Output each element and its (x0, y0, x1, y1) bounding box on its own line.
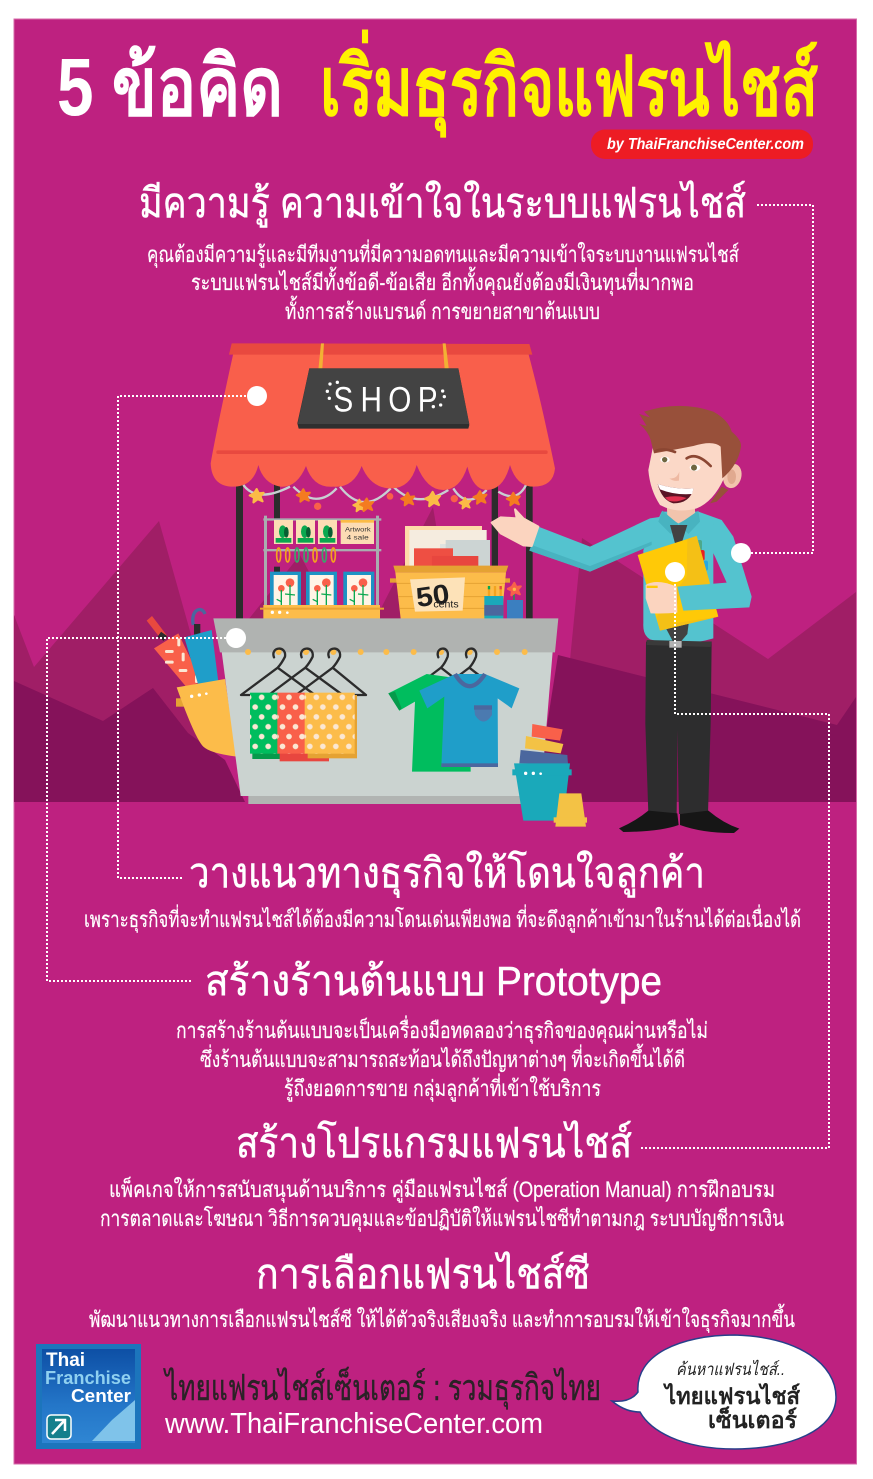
text block 4 (100, 1175, 784, 1232)
heading 1: มีความรู้ ความเข้าใจในระบบแฟรนไชส์ (139, 180, 746, 228)
art rack: Artwork (345, 526, 372, 533)
holding arm (677, 520, 752, 611)
text block 3: การสร้างร้านต้นแบบจะเป็นเครื่องมือทดลองว่าธุรกิจของคุณผ่านหรือไม่ (176, 1015, 708, 1044)
footer url: www.ThaiFranchiseCenter.com (164, 1408, 543, 1440)
marker: counter (226, 628, 246, 648)
text block 3 (176, 1015, 708, 1102)
speech bubble: ไทยแฟรนไชส์ (662, 1382, 801, 1409)
nose (669, 472, 679, 481)
umbrellas (147, 610, 218, 687)
stall posts (236, 483, 533, 620)
belt (647, 640, 712, 648)
shop sign: SHOP (333, 380, 438, 419)
mouth (658, 484, 694, 503)
connector: folder to heading 4 (640, 580, 829, 1148)
counter body (222, 652, 553, 796)
connector: counter to heading 3 (47, 638, 230, 981)
holding hand (646, 582, 677, 614)
pen jar and flower (484, 583, 523, 619)
basket with papers: 50 (414, 578, 451, 613)
byline pill (591, 130, 813, 159)
speech bubble: เซ็นเตอร์ (708, 1405, 798, 1433)
awning trim (216, 343, 548, 454)
eyes (660, 457, 700, 471)
awning (211, 353, 555, 490)
tabs (697, 540, 708, 571)
shoes (619, 811, 739, 833)
back hair (710, 487, 728, 503)
extended hand (492, 509, 538, 546)
speech bubble (612, 1335, 836, 1449)
art rack: 4 sale (347, 534, 369, 541)
text block 1 (147, 239, 739, 324)
heading 4: สร้างโปรแกรมแฟรนไชส์ (236, 1120, 632, 1166)
neck and collar (658, 497, 700, 534)
garland (243, 485, 526, 511)
counter base (248, 795, 527, 804)
basket with papers: cents (433, 599, 459, 610)
heading 3: สร้างร้านต้นแบบ Prototype (205, 958, 662, 1004)
t-shirts (388, 649, 519, 772)
title (57, 29, 818, 138)
sign straps (318, 343, 449, 373)
eyebrows (655, 449, 711, 466)
hangers and towels (241, 649, 366, 761)
stacked buckets (512, 724, 587, 827)
trousers (645, 642, 712, 814)
logo: Thai Franchise Center: Franchise (45, 1367, 131, 1388)
counter studs (245, 649, 528, 655)
heading 2: วางแนวทางธุรกิจให้โดนใจลูกค้า (189, 850, 705, 898)
marker: man shoulder (731, 543, 751, 563)
mountains backdrop (14, 507, 856, 802)
marker: awning (247, 386, 267, 406)
hair (639, 406, 741, 478)
folder (638, 536, 718, 631)
text block 1: ระบบแฟรนไชส์มีทั้งข้อดี-ข้อเสีย อีกทั้งคุณยังต้องมีเงินทุนที่มากพอ (191, 267, 694, 296)
marker: folder (665, 562, 685, 582)
logo: Thai Franchise Center: Center (71, 1385, 131, 1406)
text block 1: ทั้งการสร้างแบรนด์ การขยายสาขาต้นแบบ (285, 296, 600, 324)
shirt torso (643, 512, 722, 644)
illustration: shop stall upper (211, 343, 555, 620)
illustration: umbrellas and counter (147, 610, 587, 827)
counter top (213, 618, 558, 652)
speech bubble: ค้นหาแฟรนไชส์.. (676, 1359, 785, 1379)
shop sign (297, 368, 469, 429)
heading 5: การเลือกแฟรนไชส์ซี (256, 1251, 590, 1297)
logo: Thai Franchise Center (36, 1344, 141, 1449)
logo: Thai Franchise Center: Thai (46, 1350, 85, 1371)
basket with papers (390, 526, 510, 619)
art rack (260, 516, 384, 619)
connector: awning to heading 2 (118, 396, 250, 878)
connector: heading 1 to man (745, 205, 813, 553)
illustration: businessman (492, 406, 752, 833)
yellow bucket (176, 679, 237, 757)
extended arm (529, 517, 662, 572)
ear (720, 462, 744, 490)
face (648, 440, 724, 511)
text block 3: ซึ่งร้านต้นแบบจะสามารถสะท้อนได้ถึงปัญหาต่างๆ ที่จะเกิดขึ้นได้ดี (200, 1044, 685, 1072)
footer tagline: ไทยแฟรนไชส์เซ็นเตอร์ : รวมธุรกิจไทย (163, 1365, 601, 1410)
text block 3: รู้ถึงยอดการขาย กลุ่มลูกค้าที่เข้าใช้บริการ (284, 1073, 601, 1102)
byline pill: by ThaiFranchiseCenter.com (607, 136, 804, 153)
tie (666, 525, 689, 647)
title: 5 ข้อคิด (57, 42, 283, 133)
